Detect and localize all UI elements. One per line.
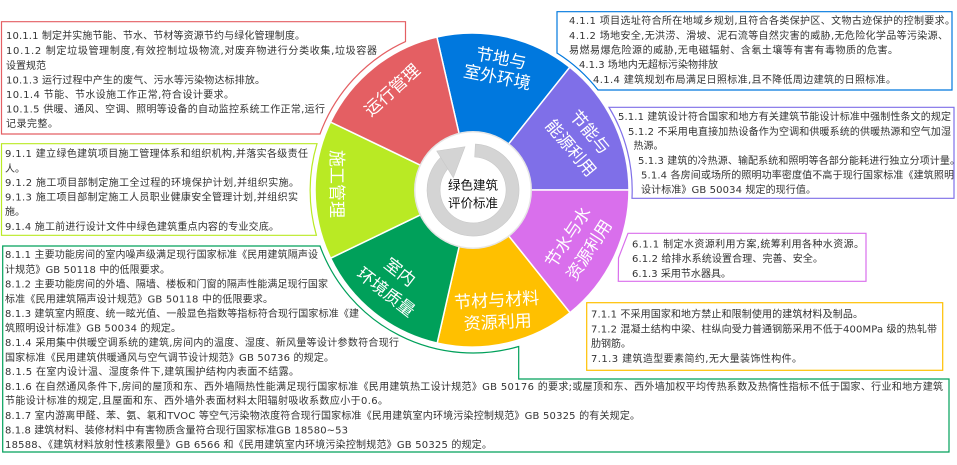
text: land saving items: 4.1.3 场地内无超标污染物排放 bbox=[579, 58, 718, 71]
panel: operations management bbox=[2, 22, 406, 134]
text: water saving items: 6.1.1 制定水资源利用方案,统筹利用各种水资源。 bbox=[632, 238, 864, 250]
text: indoor environment items: 节能设计标准的规定,且屋面和东、西外墙外表面材料太阳辐射吸收系数应小于0.6。 bbox=[5, 394, 388, 407]
panel: energy saving bbox=[609, 107, 957, 198]
label: energy saving: 节能与 bbox=[566, 107, 613, 158]
label: water saving: 节水与水 bbox=[542, 204, 595, 271]
hub title: 绿色建筑 bbox=[448, 178, 498, 192]
text: material saving items bbox=[591, 308, 937, 365]
text: indoor environment items: 8.1.6 在自然通风条件下,房间的屋顶和东、西外墙隔热性能满足现行国家标准《民用建筑热工设计规范》GB 50176 的要求;或屋顶和东、西外墙加权平均传热系数及热惰性指标不低于国家、行业和地方建筑 bbox=[5, 380, 943, 393]
panel: land saving and outdoor environment bbox=[557, 12, 955, 90]
text: land saving items: 4.1.1 项目选址符合所在地域乡规划,且符合各类保护区、文物古迹保护的控制要求。 bbox=[569, 14, 955, 27]
text: land saving items: 易燃易爆危险源的威胁,无电磁辐射、含氡土壤等有害有毒物质的危害。 bbox=[569, 44, 898, 56]
text: indoor environment items: 8.1.7 室内游离甲醛、苯、氨、氡和TVOC 等空气污染物浓度符合现行国家标准《民用建筑室内环境污染控制规范》GB 50325 的有关规定。 bbox=[5, 409, 640, 422]
text: operations items: 10.1.4 节能、节水设施工作正常,符合设计要求。 bbox=[6, 88, 234, 101]
text: indoor environment items: 8.1.1 主要功能房间的室内噪声级满足现行国家标准《民用建筑隔声设 bbox=[5, 248, 318, 261]
label: water saving: 资源利用 bbox=[563, 217, 616, 284]
text: construction items: 9.1.2 施工项目部制定施工全过程的环境保护计划,并组织实施。 bbox=[5, 176, 299, 189]
central hub bbox=[414, 131, 532, 249]
text: operations items: 10.1.3 运行过程中产生的废气、污水等污染物达标排放。 bbox=[6, 74, 265, 86]
text: land saving items: 4.1.2 场地安全,无洪涝、滑坡、泥石流等自然灾害的威胁,无危险化学品等污染源、 bbox=[569, 29, 948, 42]
label: land saving: 室外环境 bbox=[462, 62, 532, 93]
panel: construction management bbox=[2, 144, 317, 235]
text: land saving items: 4.1.4 建筑规划布局满足日照标准,且不降低周边建筑的日照标准。 bbox=[593, 73, 896, 86]
circular wheel of seven categories bbox=[315, 33, 629, 347]
text: water saving items: 6.1.3 采用节水器具。 bbox=[632, 268, 731, 280]
text: energy saving items: 5.1.3 建筑的冷热源、输配系统和照明等各部分能耗进行独立分项计量。 bbox=[638, 154, 957, 167]
label: construction management: 施工管理 bbox=[327, 150, 346, 218]
panel: water saving bbox=[618, 233, 866, 281]
wedge: land saving bbox=[437, 33, 570, 190]
text: operations items: 设置规范 bbox=[6, 59, 46, 72]
hub title: 评价标准 bbox=[448, 196, 498, 210]
label: indoor environment: 环境质量 bbox=[353, 264, 418, 321]
text: indoor environment items: 18588、《建筑材料放射性核素限量》GB 6566 和《民用建筑室内环境污染控制规范》GB 50325 的规定。 bbox=[5, 438, 492, 451]
text: indoor environment items: 国家标准《民用建筑供暖通风与空气调节设计规范》GB 50736 的规定。 bbox=[5, 351, 334, 364]
text: indoor environment items: 8.1.3 建筑室内照度、统一眩光值、一般显色指数等指标符合现行国家标准《建 bbox=[5, 307, 359, 320]
label: indoor environment: 室内 bbox=[380, 254, 419, 290]
text: construction items: 人。 bbox=[5, 163, 25, 175]
text: construction items bbox=[5, 147, 308, 233]
text: indoor environment items: 8.1.5 在室内设计温、湿度条件下,建筑围护结构内表面不结露。 bbox=[5, 365, 299, 378]
text: material saving items: 7.1.3 建筑造型要素简约,无大量装饰性构件。 bbox=[591, 352, 802, 365]
text: construction items: 施。 bbox=[5, 205, 25, 218]
panel: material saving bbox=[587, 303, 943, 370]
text: construction items: 9.1.4 施工前进行设计文件中绿色建筑重点内容的专业交底。 bbox=[5, 220, 279, 233]
hub title bbox=[448, 178, 498, 210]
text: indoor environment items: 8.1.2 主要功能房间的外墙、隔墙、楼板和门窗的隔声性能满足现行国家 bbox=[5, 278, 328, 290]
text: indoor environment items: 8.1.4 采用集中供暖空调系统的建筑,房间内的温度、湿度、新风量等设计参数符合现行 bbox=[5, 336, 399, 349]
text: indoor environment items: 标准《民用建筑隔声设计规范》GB 50118 中的低限要求。 bbox=[5, 292, 273, 306]
wedge labels bbox=[327, 44, 616, 334]
text: land saving items bbox=[569, 14, 955, 86]
text: operations items bbox=[6, 29, 377, 130]
text: energy saving items bbox=[618, 110, 957, 196]
label: land saving: 节地与 bbox=[474, 44, 528, 73]
text: operations items: 记录完整。 bbox=[6, 117, 58, 130]
text: construction items: 9.1.3 施工项目部制定施工人员职业健康安全管理计划,并组织实 bbox=[5, 190, 298, 204]
text: material saving items: 肋钢筋。 bbox=[591, 337, 631, 350]
icon: circular arrow bbox=[427, 144, 519, 236]
text: energy saving items: 5.1.1 建筑设计符合国家和地方有关建筑节能设计标准中强制性条文的规定 bbox=[618, 110, 951, 123]
text: operations items: 10.1.5 供暖、通风、空调、照明等设备的自动监控系统工作正常,运行 bbox=[6, 102, 325, 116]
label: operations management: 运行管理 bbox=[361, 61, 424, 120]
text: indoor environment items: 筑照明设计标准》GB 50034 的规定。 bbox=[5, 322, 181, 334]
label: energy saving: 能源利用 bbox=[541, 116, 600, 180]
text: construction items: 9.1.1 建立绿色建筑项目施工管理体系和组织机构,并落实各级责任 bbox=[5, 147, 308, 160]
wedge: operations management bbox=[330, 37, 472, 190]
text: indoor environment items: 计规范》GB 50118 中的低限要求。 bbox=[5, 263, 170, 276]
text: material saving items: 7.1.1 不采用国家和地方禁止和限制使用的建筑材料及制品。 bbox=[591, 308, 863, 320]
panel: indoor environment quality bbox=[3, 246, 949, 452]
text: energy saving items: 5.1.4 各房间或场所的照明功率密度值不高于现行国家标准《建筑照明 bbox=[641, 168, 954, 182]
text: operations items: 10.1.2 制定垃圾管理制度,有效控制垃圾物流,对废弃物进行分类收集,垃圾容器 bbox=[6, 44, 377, 57]
text: energy saving items: 设计标准》GB 50034 规定的现行值。 bbox=[641, 183, 816, 196]
wedge: material saving bbox=[437, 190, 570, 347]
label: material saving: 节材与材料 bbox=[454, 289, 540, 312]
text: water saving items: 6.1.2 给排水系统设置合理、完善、安全。 bbox=[632, 252, 823, 265]
label: material saving bbox=[454, 289, 540, 334]
wedge: indoor environment bbox=[331, 190, 472, 343]
wedge: water saving bbox=[472, 190, 629, 313]
text: energy saving items: 热源。 bbox=[634, 139, 664, 152]
text: operations items: 10.1.1 制定并实施节能、节水、节材等资源节约与绿化管理制度。 bbox=[6, 29, 305, 42]
wedge: construction management bbox=[315, 122, 472, 258]
label: material saving: 资源利用 bbox=[463, 311, 532, 334]
text: indoor environment items bbox=[5, 248, 943, 451]
wedge: energy saving bbox=[472, 67, 629, 190]
text: material saving items: 7.1.2 混凝土结构中梁、柱纵向受力普通钢筋采用不低于400MPa 级的热轧带 bbox=[591, 322, 937, 336]
text: energy saving items: 5.1.2 不采用电直接加热设备作为空调和供暖系统的供暖热源和空气加湿 bbox=[628, 125, 951, 138]
label: water saving bbox=[542, 204, 616, 284]
text: water saving items bbox=[632, 238, 864, 280]
label: land saving bbox=[462, 44, 532, 93]
text: indoor environment items: 8.1.8 建筑材料、装修材料中有害物质含量符合现行国家标准GB 18580~53 bbox=[5, 424, 348, 436]
